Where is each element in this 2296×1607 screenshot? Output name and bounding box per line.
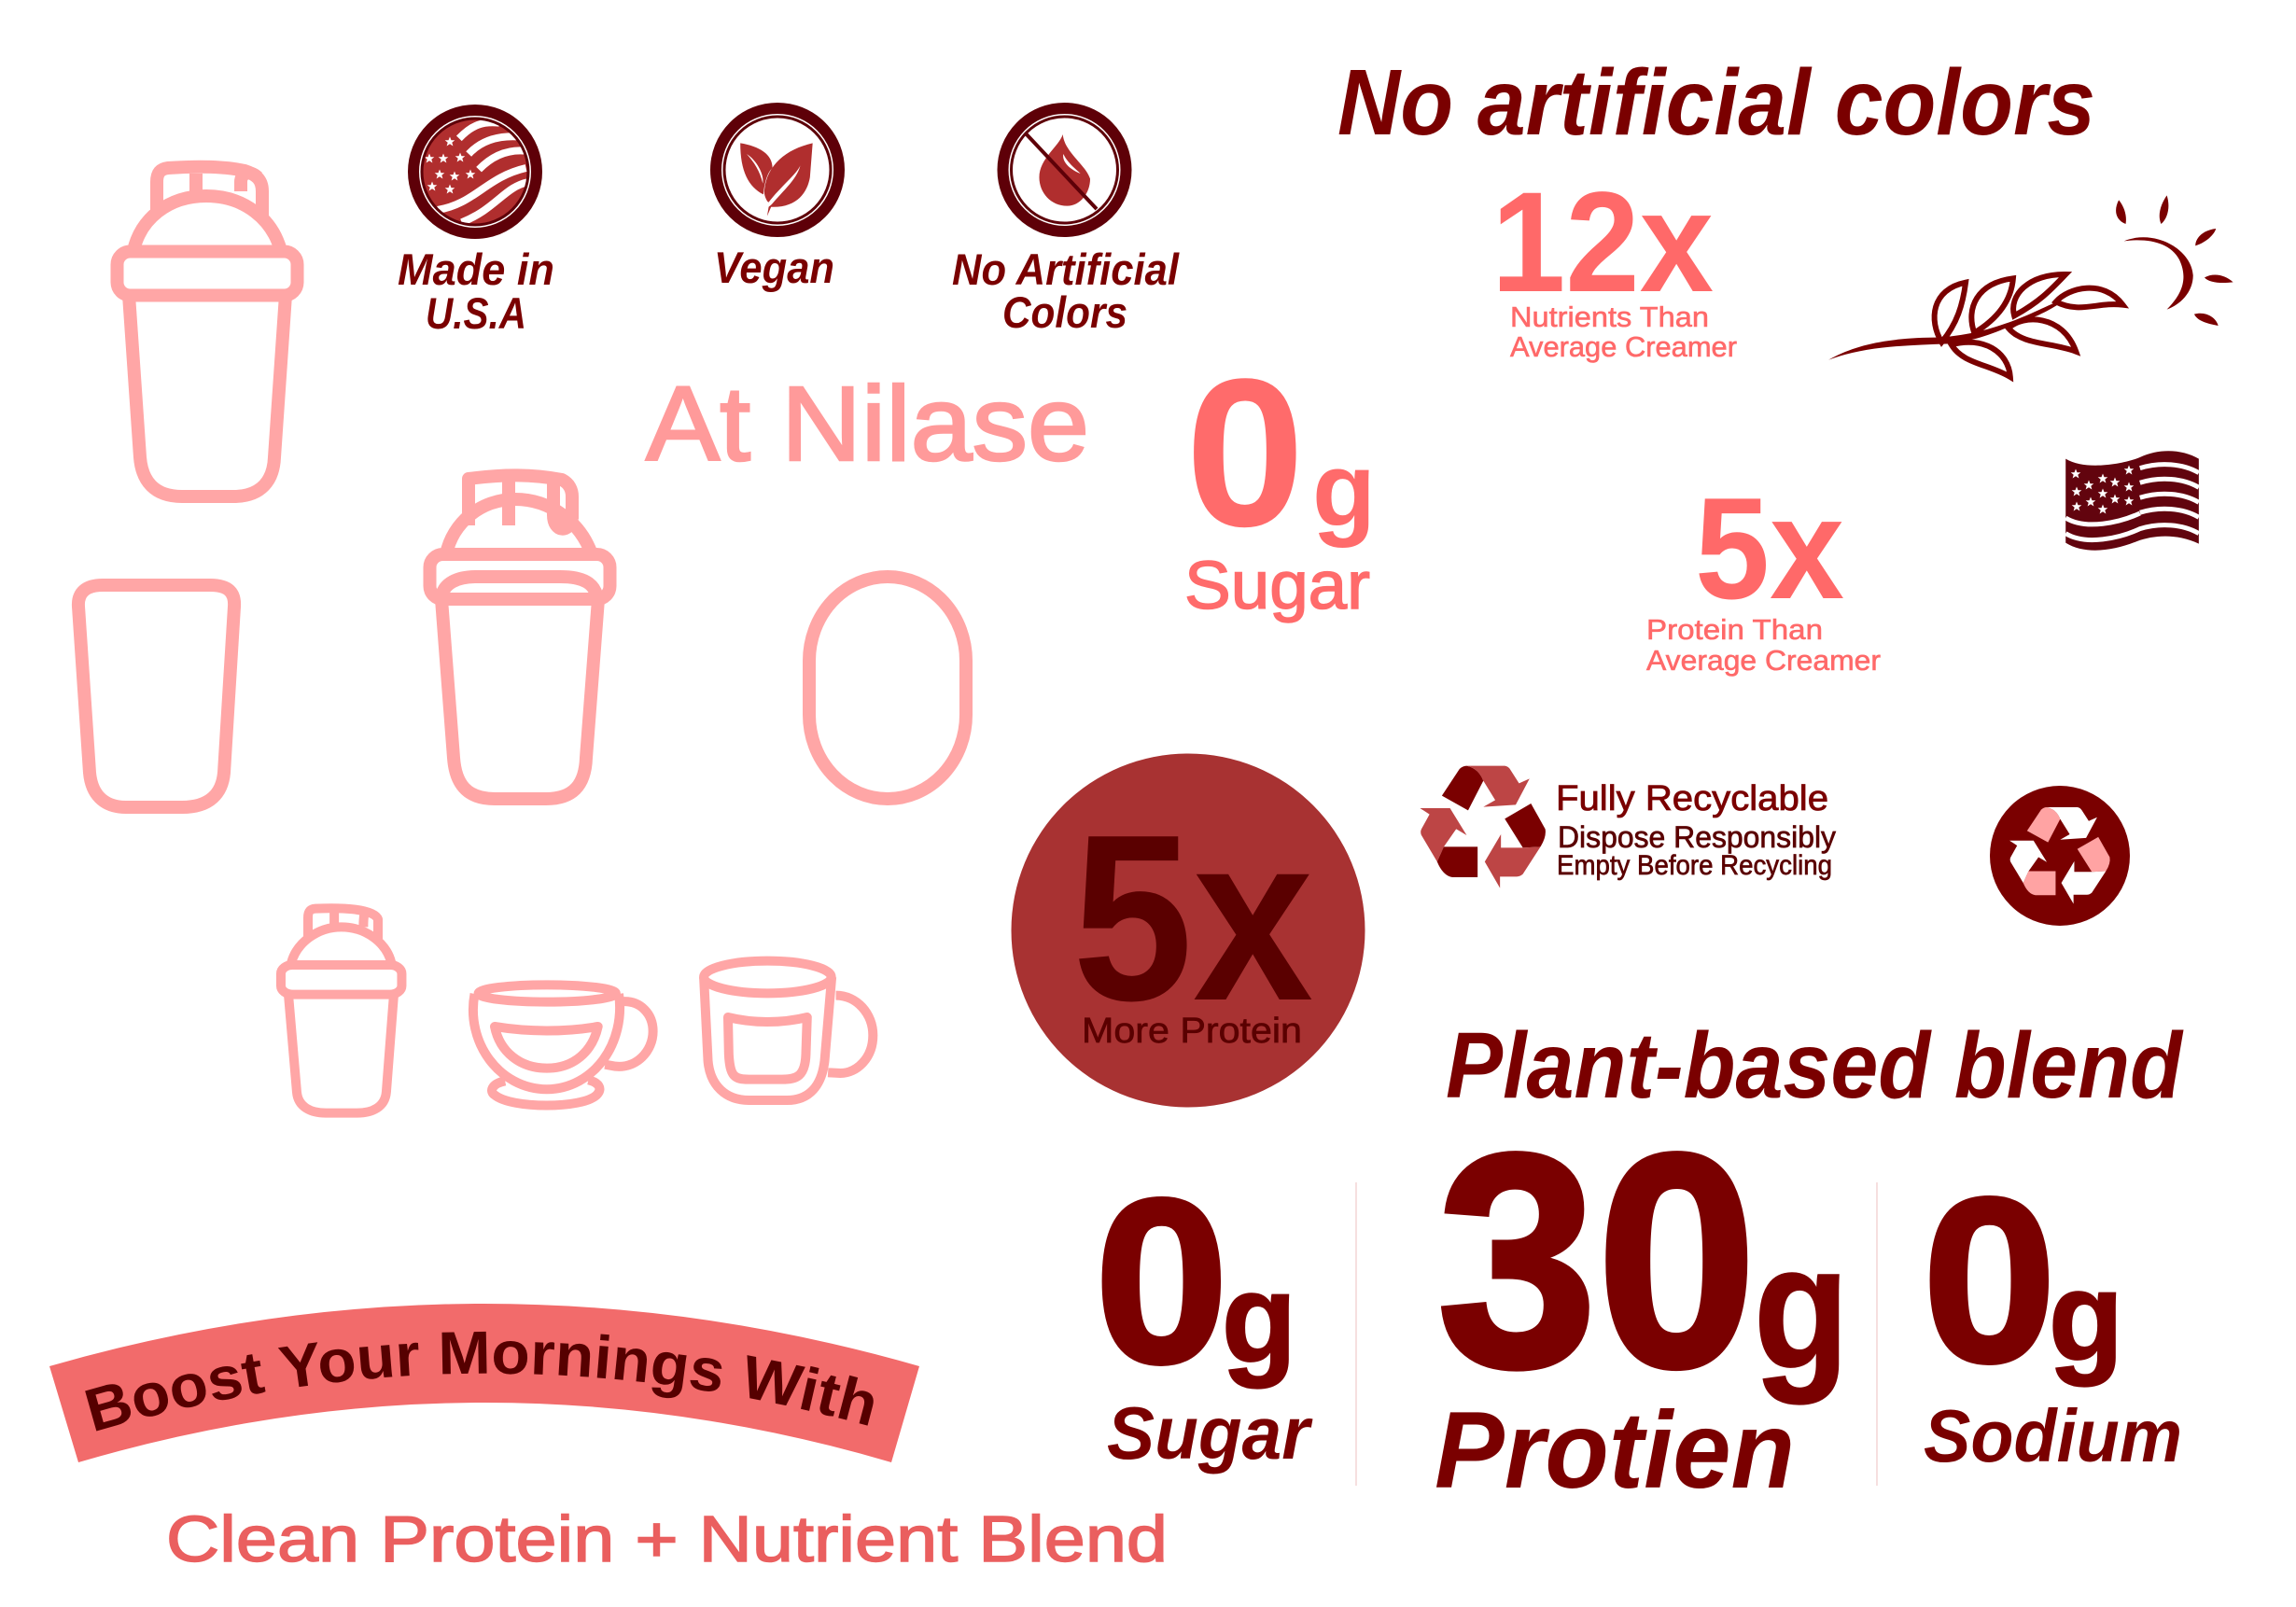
stat: 12x nutrients: 12x: [1491, 162, 1714, 322]
label: No Artificial Colors: No Artificial: [952, 245, 1180, 294]
stat: 0g sodium: g: [2049, 1246, 2123, 1387]
stat: 0g sugar coral: Sugar: [1184, 549, 1370, 623]
stat: 12x nutrients: Nutrients Than: [1510, 300, 1709, 333]
stat: 5x protein coral: 5x: [1695, 468, 1844, 629]
badge: made in USA: [398, 110, 554, 338]
icon: shaker cup base: [78, 585, 234, 807]
stat: 30g protein: 30: [1437, 1091, 1757, 1430]
heading: At Nilase: At Nilase: [646, 365, 1089, 482]
stat: 30g protein: g: [1754, 1209, 1849, 1404]
icon: shaker bottle with inner cup: [429, 475, 610, 799]
stat: 30g protein: Protien: [1435, 1389, 1795, 1511]
stat: 0g sugar: Sugar: [1107, 1391, 1313, 1474]
tagline: Clean Protein + Nutrient Blend: Clean Protein + Nutrient Blend: [166, 1502, 1168, 1575]
icon: wheat sprig and sun: [1828, 195, 2233, 377]
icon: crossed drop badge: [1002, 108, 1126, 231]
stat: 0g sodium: Sodium: [1924, 1394, 2182, 1477]
badge: vegan: [714, 108, 839, 292]
stat: 0g sugar: [1095, 1151, 1313, 1474]
icon: waving American flag: [2065, 451, 2199, 551]
stat: 0g sugar: 0: [1095, 1151, 1228, 1411]
label: No Artificial Colors: Colors: [1002, 287, 1127, 337]
stat: 5x protein coral: Protein Than: [1646, 613, 1823, 646]
label: Made in U.S.A: [398, 245, 554, 338]
heading: Plant-based blend: Plant-based blend: [1446, 1013, 2184, 1118]
icon: recycle symbol: [1420, 766, 1546, 888]
text: Fully Recyclable disposal note: Fully Recyclable: [1556, 779, 1828, 818]
stat: 0g sodium: [1923, 1150, 2182, 1477]
icon: recycle circle badge: [1990, 786, 2130, 926]
callout: 5x more protein circle: More Protein: [1082, 1012, 1302, 1051]
callout: 5x more protein circle: [1012, 754, 1365, 1107]
text: Fully Recyclable disposal note: Empty Before Recycling: [1557, 850, 1832, 881]
icon: flag badge: [413, 110, 537, 233]
icon: small shaker: [281, 908, 401, 1113]
icon: mug: [704, 961, 873, 1100]
stat: 0g sugar coral: g: [1312, 431, 1376, 548]
icon: capsule lid: [809, 577, 966, 799]
stat: 12x nutrients: Average Creamer: [1510, 330, 1737, 363]
stat: 5x protein coral: [1646, 468, 1881, 677]
stat: 30g protein: [1435, 1091, 1849, 1511]
stat: 0g sugar coral: 0: [1185, 334, 1305, 570]
label: Made in U.S.A: Made in: [398, 245, 554, 294]
text: Fully Recyclable disposal note: Dispose Responsibly: [1558, 820, 1836, 854]
icon: coffee cup with saucer: [473, 985, 653, 1106]
stat: 0g sugar coral: [1184, 334, 1376, 623]
stat: 0g sugar: g: [1222, 1248, 1296, 1389]
stat: 0g sodium: 0: [1923, 1150, 2056, 1410]
heading: No artificial colors: No artificial colors: [1337, 50, 2095, 155]
label: No Artificial Colors: [952, 245, 1180, 337]
icon: leaf badge: [716, 108, 839, 231]
label: Vegan: Vegan: [714, 243, 834, 292]
icon: shaker bottle closed: [118, 167, 297, 496]
stat: 5x protein coral: Average Creamer: [1646, 644, 1881, 677]
label: Made in U.S.A: U.S.A: [426, 288, 526, 338]
callout: 5x more protein circle: 5x: [1072, 785, 1313, 1050]
text: Fully Recyclable disposal note: [1556, 779, 1836, 881]
banner: Boost Your Mornings With: Boost Your Mornings With: [85, 1331, 874, 1432]
badge: no artificial colors: [952, 108, 1180, 337]
